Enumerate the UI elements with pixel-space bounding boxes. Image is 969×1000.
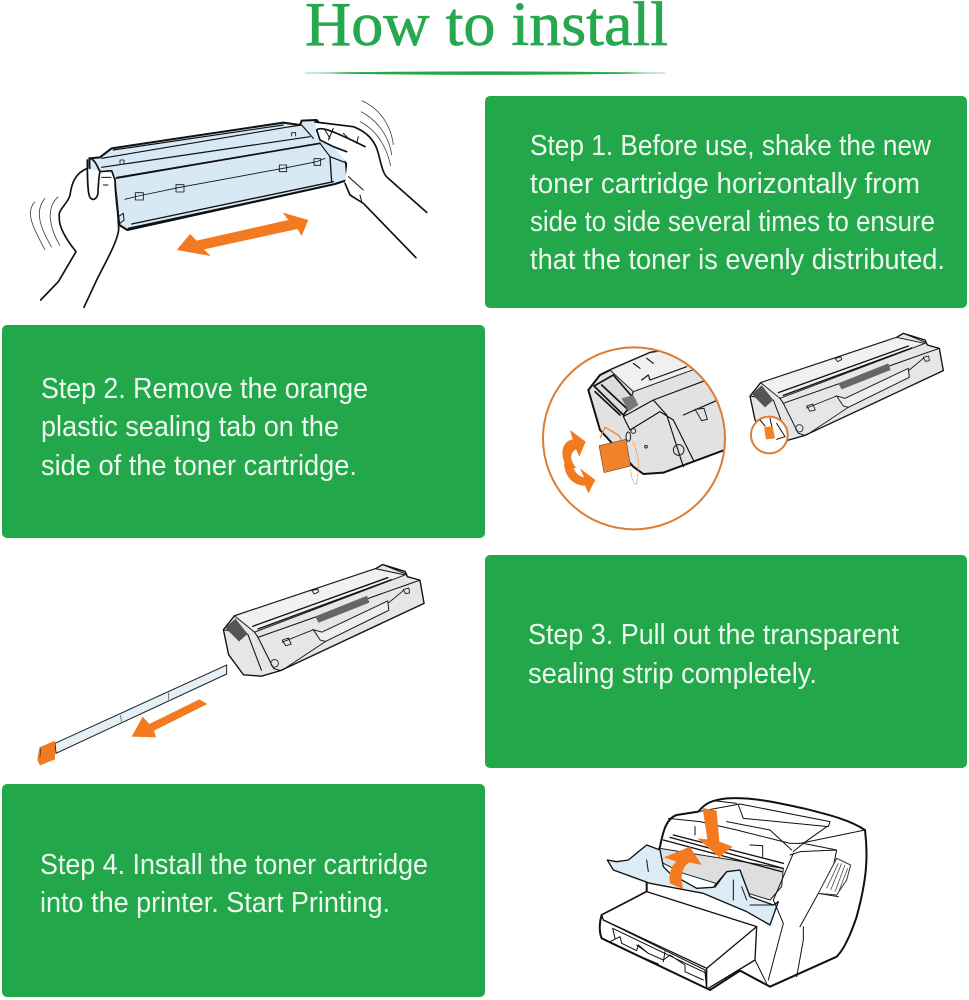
illustration: printer [600,798,867,990]
small cartridge [750,333,943,441]
left hand [41,168,119,307]
side vent [818,858,851,895]
illustration: hands shaking cartridge [30,101,427,307]
step 1 text: Step 1. Before use, shake the new [530,130,932,162]
panel: step 1 [485,96,967,308]
orange tab [599,439,631,473]
step 4 text: into the printer. Start Printing. [40,887,390,919]
rotate arrows [562,430,586,468]
top lines [668,801,865,867]
step 1 text: toner cartridge horizontally from [530,168,920,200]
step 3 text: sealing strip completely. [528,658,817,690]
panel: step 4 [2,784,485,997]
panel: step 2 [2,325,485,538]
double arrow [177,213,308,256]
printer body [600,798,867,990]
illustration: pulling sealing strip [37,565,424,765]
orange pull tab [37,741,55,765]
step 2 text: side of the toner cartridge. [41,450,357,482]
orange arrows [697,808,733,857]
small magnifier with tab [751,417,788,453]
step 2 text: plastic sealing tab on the [41,411,339,443]
right side [755,853,838,983]
motion lines [30,101,393,250]
panel: step 3 [485,555,967,768]
cartridge body [89,120,347,230]
step 2 text: Step 2. Remove the orange [41,373,368,405]
blue flap [607,845,778,925]
cartridge [223,565,424,676]
title underline [305,72,665,75]
illustration: removing orange tab [543,333,943,529]
magnifier circle [543,347,725,529]
interior [657,848,783,900]
right hand [315,122,388,203]
step 4 text: Step 4. Install the toner cartridge [40,849,428,881]
step 1 text [530,130,945,276]
paper tray [602,892,757,968]
sealing strip [55,665,227,753]
arrow [132,699,207,737]
magnified cartridge [587,350,724,475]
step 3 text: Step 3. Pull out the transparent [528,619,899,651]
step 2 text [41,373,368,482]
step 3 text [528,619,899,690]
step 4 text [40,849,428,919]
step 1 text: that the toner is evenly distributed. [530,244,945,276]
